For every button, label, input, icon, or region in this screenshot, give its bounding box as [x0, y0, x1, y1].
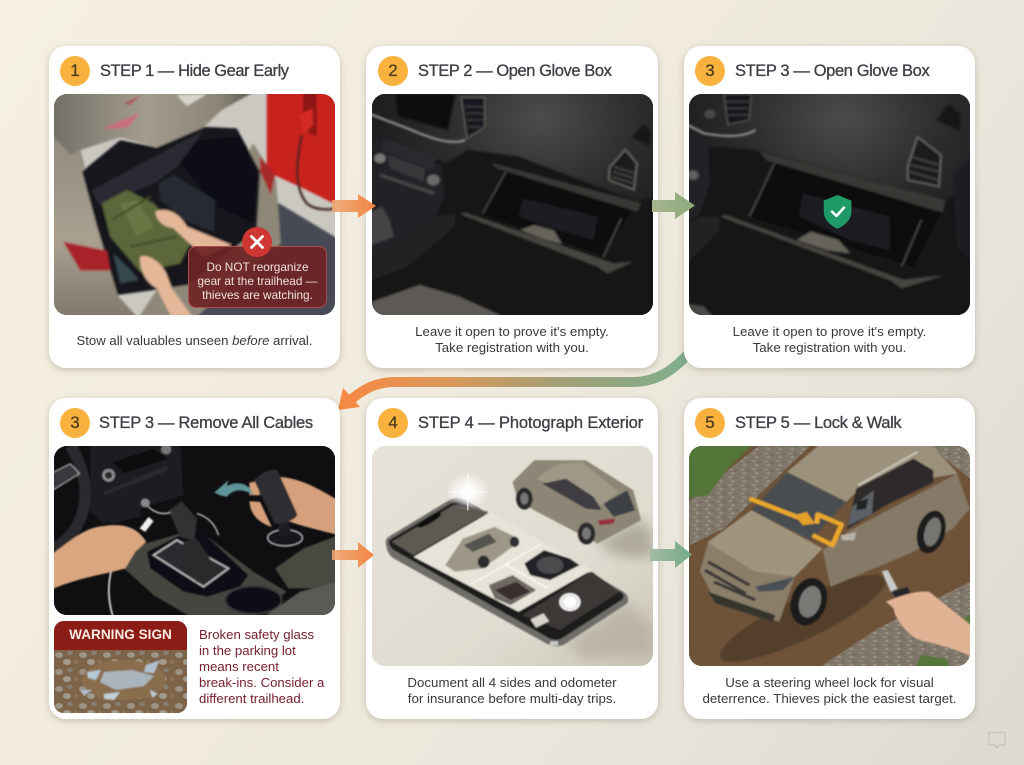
caption [415, 324, 609, 355]
warning text: break-ins. Consider a [199, 675, 324, 690]
photo: car with steering lock and key fob [689, 446, 970, 666]
step number badge [60, 56, 90, 86]
heading: STEP 2 — Open Glove Box [418, 62, 611, 80]
photo: broken safety glass [54, 650, 187, 713]
step number badge [695, 408, 725, 438]
panel: step 4 [366, 398, 658, 719]
arrow: step 2 to 3 [652, 192, 695, 219]
panel: step 2 [366, 46, 658, 368]
warning text: means recent [199, 659, 279, 674]
panel: step 1 [49, 46, 340, 368]
caption [702, 675, 956, 706]
icon: chat bubble [988, 732, 1006, 749]
panel: step 3 glove box [684, 46, 975, 368]
heading: STEP 3 — Open Glove Box [735, 62, 929, 80]
photo: open empty glove box [372, 94, 653, 315]
step number badge [378, 408, 408, 438]
caption: Take registration with you. [753, 340, 906, 355]
caption: Take registration with you. [435, 340, 589, 355]
heading: STEP 4 — Photograph Exterior [418, 414, 643, 432]
step number badge [695, 56, 725, 86]
icon: red x [242, 227, 272, 257]
callout: warning: Do NOT reorganize [206, 260, 309, 274]
caption: Stow all valuables unseen before arrival. [77, 333, 312, 348]
arrow: step 4 to 5 [650, 541, 692, 568]
curved arrow: row 1 to row 2 [338, 351, 688, 410]
warning text: different trailhead. [199, 691, 304, 706]
caption: for insurance before multi-day trips. [408, 691, 616, 706]
caption [733, 324, 926, 355]
arrow: cables to step 4 [332, 542, 374, 568]
warning sign box [54, 621, 187, 713]
photo: phone photographing car [372, 446, 653, 666]
callout: warning: thieves are watching. [202, 288, 313, 302]
step number badge: 3 [705, 61, 715, 80]
heading: STEP 1 — Hide Gear Early [100, 62, 289, 80]
panel: step 3 cables [49, 398, 340, 719]
step number badge: 4 [388, 413, 398, 432]
step number badge [60, 408, 90, 438]
photo: stowing gear in trunk [54, 94, 335, 315]
step number badge: 2 [388, 61, 398, 80]
arrow: step 1 to 2 [332, 194, 376, 218]
panel: step 5 [684, 398, 975, 719]
warning sign label [54, 621, 187, 650]
caption: Use a steering wheel lock for visual [725, 675, 934, 690]
warning text: Broken safety glass [199, 627, 314, 642]
warning text [199, 627, 324, 706]
step number badge: 5 [705, 413, 715, 432]
caption: Leave it open to prove it's empty. [415, 324, 609, 339]
callout: warning: gear at the trailhead — [197, 274, 318, 288]
caption: deterrence. Thieves pick the easiest target. [702, 691, 956, 706]
step number badge: 1 [70, 61, 80, 80]
step number badge [378, 56, 408, 86]
callout: warning [188, 246, 327, 308]
warning text: in the parking lot [199, 643, 296, 658]
caption [407, 675, 617, 706]
heading: STEP 3 — Remove All Cables [99, 414, 313, 432]
step number badge: 3 [70, 413, 80, 432]
photo: glove box with shield [689, 94, 970, 315]
heading: STEP 5 — Lock & Walk [735, 414, 901, 432]
warning sign label: WARNING SIGN [69, 627, 172, 642]
icon: green shield [824, 195, 851, 229]
caption: Document all 4 sides and odometer [407, 675, 617, 690]
photo: removing cables and phone mount [54, 446, 335, 615]
caption: Leave it open to prove it's empty. [733, 324, 926, 339]
